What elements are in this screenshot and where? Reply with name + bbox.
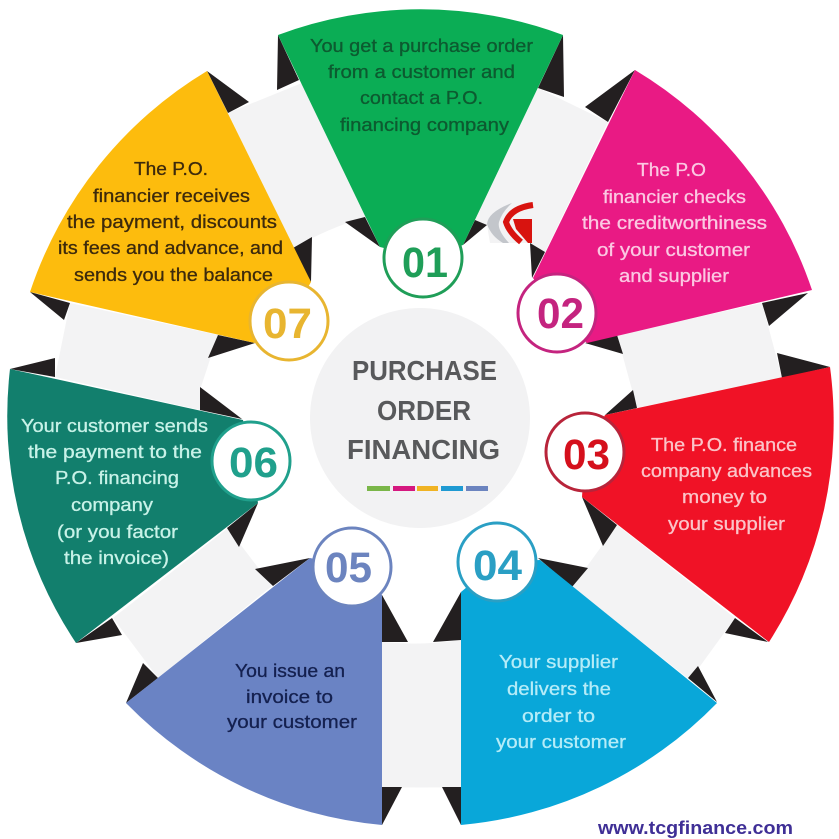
panel: step 03 — [546, 353, 834, 642]
green wedge — [278, 9, 563, 258]
red wedge — [582, 367, 834, 642]
number badge 06 — [212, 422, 290, 500]
text: step 06 description: P.O. financing — [55, 467, 179, 488]
connector band: 02 to 03 — [617, 303, 782, 408]
text: step 03 description: your supplier — [668, 513, 785, 534]
text: step 07 description: its fees and advance, and — [58, 237, 283, 258]
black fold tabs 01 — [277, 35, 564, 247]
number badge 05 — [313, 528, 391, 606]
panel: step 07 — [30, 71, 328, 360]
panel: step 04 — [433, 523, 717, 825]
text: step 03 description: The P.O. finance — [651, 434, 797, 455]
yellow wedge — [30, 71, 311, 343]
connector band: 06 to 07 — [55, 303, 218, 410]
text: step 05 description — [227, 660, 357, 732]
pink wedge — [533, 70, 812, 343]
connector band: 01 to 02 — [475, 88, 608, 252]
text: step 04 description: your customer — [496, 731, 626, 752]
black fold tabs 07 — [30, 71, 312, 358]
blue wedge — [461, 560, 717, 825]
text: step 01 description: You get a purchase order — [310, 35, 533, 56]
number badge 04 — [458, 523, 536, 601]
number badge 04: 04 — [473, 542, 522, 590]
purple wedge — [126, 558, 382, 825]
text: step 04 description: delivers the — [507, 678, 611, 699]
text: step 06 description — [21, 415, 208, 568]
text: step 07 description: the payment, discounts — [67, 211, 277, 232]
title — [347, 355, 500, 465]
text: step 07 description: sends you the balance — [74, 264, 273, 285]
number badge 03 — [546, 413, 624, 491]
black fold tabs 03 — [582, 353, 830, 642]
text: step 06 description: the invoice) — [64, 547, 169, 568]
title: PURCHASE — [352, 355, 497, 386]
number badge 06: 06 — [229, 439, 278, 487]
website url: www.tcgfinance.com — [597, 818, 793, 838]
panel: step 05 — [126, 528, 408, 825]
text: step 02 description — [582, 159, 767, 286]
text: step 07 description — [58, 158, 283, 285]
number badge 02 — [518, 274, 596, 352]
text: step 01 description: financing company — [340, 114, 510, 135]
title: FINANCING — [347, 434, 500, 465]
text: step 07 description: financier receives — [93, 185, 250, 206]
text: step 05 description: your customer — [227, 711, 357, 732]
center hub — [310, 308, 530, 528]
number badge 01 — [384, 219, 462, 297]
text: step 05 description: You issue an — [235, 660, 345, 681]
text: step 02 description: the creditworthiness — [582, 212, 767, 233]
number badge 01: 01 — [402, 239, 448, 287]
panel: step 02 — [518, 70, 812, 354]
number badge 07 — [250, 282, 328, 360]
text: step 02 description: financier checks — [603, 186, 746, 207]
number badge 03: 03 — [563, 431, 610, 479]
text: step 02 description: and supplier — [619, 265, 729, 286]
connector band: 07 to 01 — [228, 83, 366, 248]
panel: step 01 — [277, 9, 564, 297]
black fold tabs 02 — [530, 70, 808, 354]
colour legend bar — [367, 486, 488, 491]
number badge 07: 07 — [263, 300, 312, 348]
black fold tabs 06 — [10, 358, 258, 643]
text: step 03 description — [641, 434, 812, 534]
text: step 02 description: The P.O — [637, 159, 706, 180]
text: step 03 description: money to — [682, 486, 767, 507]
connector band: 04 to 05 — [382, 640, 461, 788]
teal wedge — [7, 369, 258, 643]
text: step 03 description: company advances — [641, 460, 812, 481]
text: step 07 description: The P.O. — [134, 158, 208, 179]
text: step 06 description: company — [71, 494, 154, 515]
text: step 01 description: contact a P.O. — [360, 87, 483, 108]
number badge 05: 05 — [325, 544, 372, 592]
text: step 06 description: Your customer sends — [21, 415, 208, 436]
text: step 05 description: invoice to — [246, 686, 333, 707]
text: step 06 description: (or you factor — [57, 521, 178, 542]
text: step 02 description: of your customer — [597, 239, 750, 260]
text: step 01 description: from a customer and — [328, 61, 515, 82]
connector band: 03 to 04 — [572, 525, 735, 680]
title: ORDER — [377, 395, 471, 426]
logo: TCG mark — [487, 203, 533, 243]
connector band: 05 to 06 — [113, 528, 272, 678]
panel: step 06 — [7, 358, 290, 643]
text: step 04 description: order to — [522, 705, 595, 726]
text: step 04 description: Your supplier — [499, 651, 618, 672]
number badge 02: 02 — [537, 290, 584, 338]
black fold tabs 05 — [126, 558, 408, 825]
text: step 01 description — [310, 35, 533, 135]
text: step 04 description — [496, 651, 626, 752]
text: step 06 description: the payment to the — [28, 441, 202, 462]
black fold tabs 04 — [433, 558, 717, 825]
